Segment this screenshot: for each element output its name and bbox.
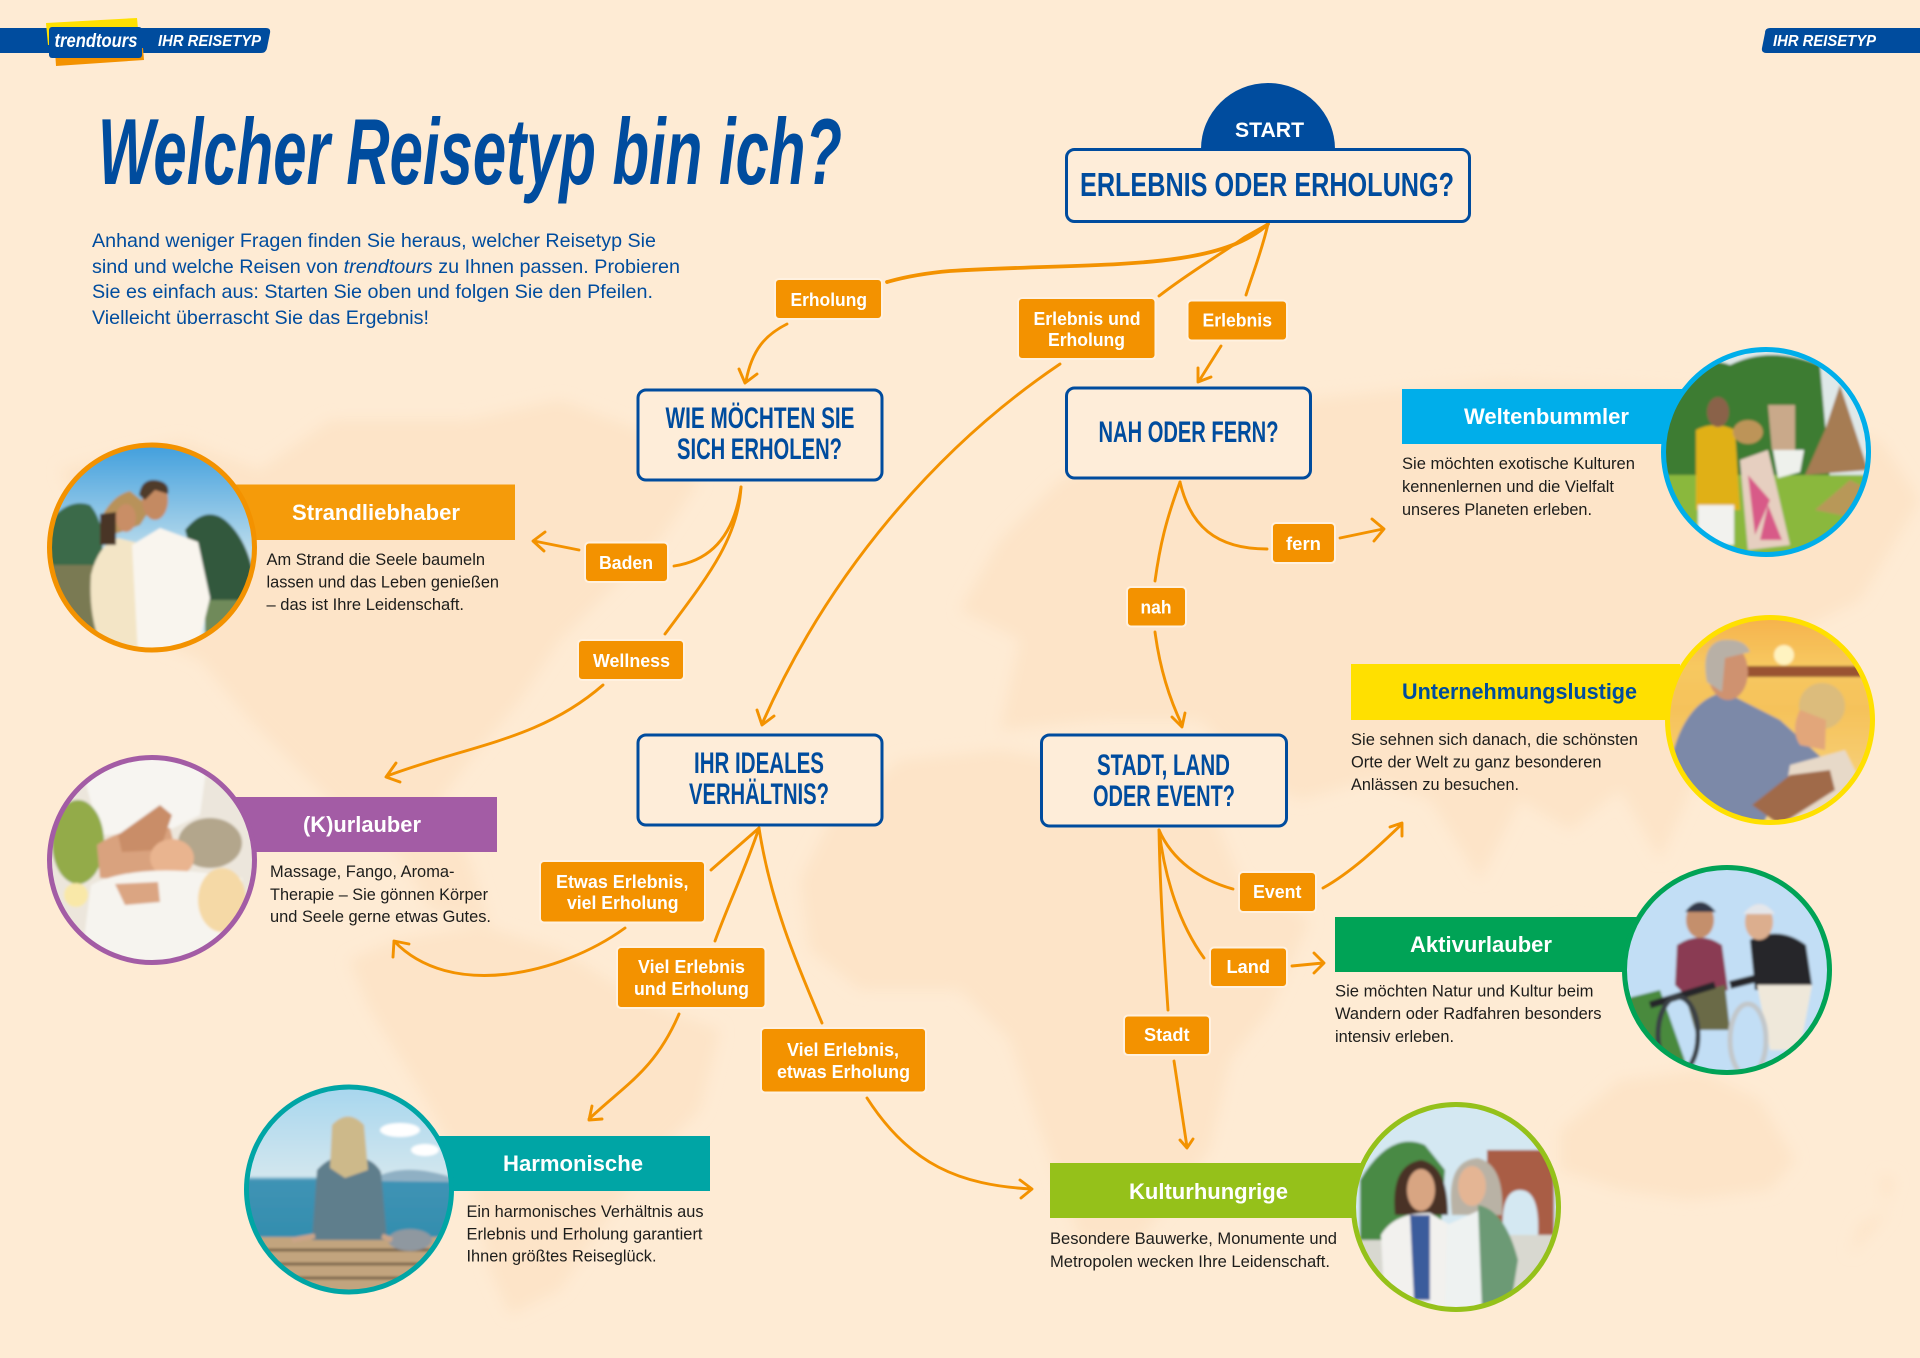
label: Stadt: Stadt — [1144, 1025, 1190, 1045]
label: Baden — [585, 542, 668, 582]
label: Viel Erlebnis und Erholung: und Erholung — [634, 979, 749, 999]
intro text: Anhand weniger Fragen finden Sie heraus, welcher Reisetyp Sie — [92, 230, 656, 252]
banner — [233, 797, 497, 852]
panel: (K)urlauber — [48, 755, 497, 970]
question box: Stadt, Land oder Event — [1042, 735, 1286, 826]
start badge: START — [1235, 119, 1304, 142]
banner title: Unternehmungslustige — [1402, 679, 1637, 704]
description: lassen und das Leben genießen — [266, 574, 499, 592]
question box: Ihr ideales Verhältnis — [638, 735, 882, 825]
description: Therapie – Sie gönnen Körper — [270, 886, 488, 904]
description: Wandern oder Radfahren besonders — [1335, 1005, 1602, 1023]
description: Sie möchten Natur und Kultur beim — [1335, 982, 1594, 1000]
label: Erholung — [775, 279, 882, 319]
label: Erholung: Erholung — [790, 290, 867, 310]
panel: Aktivurlauber — [1335, 862, 1835, 1077]
label: fern: fern — [1286, 534, 1321, 554]
description: Ihnen größtes Reiseglück. — [466, 1248, 656, 1266]
label: Event — [1239, 872, 1316, 912]
banner — [1050, 1163, 1364, 1218]
label: Land — [1210, 948, 1287, 987]
label: Land: Land — [1226, 957, 1270, 977]
description — [1351, 731, 1638, 794]
label: Erlebnis und Erholung: Erholung — [1048, 330, 1125, 350]
description — [1335, 982, 1602, 1046]
question box: Stadt, Land oder Event: ODER EVENT? — [1093, 780, 1235, 813]
label: Erlebnis und Erholung: Erlebnis und — [1034, 309, 1140, 329]
panel: Unternehmungslustige — [1351, 612, 1877, 830]
photo: travellers at temple — [1660, 345, 1872, 565]
title: Welcher Reisetyp bin ich? — [98, 99, 842, 204]
banner — [1335, 917, 1640, 972]
description: unseres Planeten erleben. — [1402, 501, 1592, 519]
label: Viel Erlebnis, etwas Erholung: Viel Erlebnis, — [787, 1040, 899, 1060]
header label: IHR REISETYP — [158, 33, 262, 50]
label: Wellness: Wellness — [593, 651, 670, 671]
question box: Wie möchten Sie sich erholen: WIE MÖCHTEN SIE — [666, 402, 854, 435]
question box: Erlebnis oder Erholung — [1066, 150, 1470, 222]
label: Wellness — [578, 640, 684, 680]
description — [270, 863, 491, 926]
banner title: Harmonische — [503, 1151, 643, 1176]
photo: two cyclists — [1620, 862, 1835, 1077]
label: Event: Event — [1253, 882, 1302, 902]
banner — [1402, 389, 1683, 444]
panel: Harmonische — [244, 1085, 710, 1297]
label: Viel Erlebnis, etwas Erholung — [761, 1028, 926, 1092]
intro text — [92, 230, 680, 329]
world map background — [60, 380, 1920, 1315]
photo: massage — [48, 755, 256, 970]
header bar right — [1762, 28, 1920, 53]
label: fern — [1272, 523, 1335, 563]
question box: Erlebnis oder Erholung: ERLEBNIS ODER ERHOLUNG? — [1080, 166, 1454, 203]
header bar right: IHR REISETYP — [1773, 33, 1877, 50]
description: Sie sehnen sich danach, die schönsten — [1351, 731, 1638, 749]
banner title: Kulturhungrige — [1129, 1179, 1288, 1204]
description: Metropolen wecken Ihre Leidenschaft. — [1050, 1253, 1330, 1271]
label: Etwas Erlebnis, viel Erholung: Etwas Erlebnis, — [556, 872, 688, 892]
header bar left with logo — [0, 18, 270, 66]
label: nah — [1127, 587, 1186, 626]
description — [1402, 455, 1635, 519]
description — [266, 551, 499, 614]
description: – das ist Ihre Leidenschaft. — [266, 596, 464, 614]
label: Etwas Erlebnis, viel Erholung — [540, 861, 705, 922]
photo: two women at arch — [1352, 1102, 1562, 1315]
description: Ein harmonisches Verhältnis aus — [466, 1203, 704, 1221]
label: Etwas Erlebnis, viel Erholung: viel Erholung — [567, 893, 678, 913]
description: Massage, Fango, Aroma- — [270, 863, 454, 881]
banner title: Strandliebhaber — [292, 500, 460, 525]
label: Erlebnis: Erlebnis — [1202, 310, 1272, 330]
banner title: Aktivurlauber — [1410, 932, 1552, 957]
logo: trendtours — [46, 18, 144, 66]
panel: Weltenbummler — [1402, 345, 1872, 565]
description — [1050, 1230, 1337, 1271]
banner title: (K)urlauber — [303, 812, 421, 837]
question box: Wie möchten Sie sich erholen — [638, 390, 882, 480]
photo: woman on jetty — [244, 1085, 454, 1297]
description: Anlässen zu besuchen. — [1351, 776, 1519, 794]
question box: Wie möchten Sie sich erholen: SICH ERHOLEN? — [677, 433, 842, 466]
photo: couple at sunset — [1665, 612, 1877, 830]
panel: Strandliebhaber — [48, 443, 515, 655]
logo: trendtours: trendtours — [54, 31, 138, 52]
description: Am Strand die Seele baumeln — [266, 551, 485, 569]
description: Erlebnis und Erholung garantiert — [466, 1226, 703, 1244]
description: Besondere Bauwerke, Monumente und — [1050, 1230, 1337, 1248]
banner — [1351, 664, 1680, 720]
label: Viel Erlebnis und Erholung: Viel Erlebnis — [638, 957, 745, 977]
description: und Seele gerne etwas Gutes. — [270, 908, 491, 926]
banner title: Weltenbummler — [1464, 404, 1629, 429]
label: nah: nah — [1140, 598, 1172, 618]
description: kennenlernen und die Vielfalt — [1402, 478, 1614, 496]
description: Sie möchten exotische Kulturen — [1402, 455, 1635, 473]
label: Viel Erlebnis und Erholung — [617, 947, 766, 1008]
label: Baden: Baden — [599, 553, 653, 573]
question box: Ihr ideales Verhältnis: IHR IDEALES — [694, 747, 824, 780]
question box: Nah oder fern: NAH ODER FERN? — [1098, 416, 1278, 449]
intro text: sind und welche Reisen von trendtours zu Ihnen passen. Probieren — [92, 256, 680, 278]
intro text: Sie es einfach aus: Starten Sie oben und folgen Sie den Pfeilen. — [92, 281, 653, 303]
panel: Kulturhungrige — [1050, 1102, 1562, 1315]
label: Stadt — [1124, 1016, 1210, 1055]
banner — [233, 484, 515, 540]
description: Orte der Welt zu ganz besonderen — [1351, 754, 1602, 772]
label: Erlebnis — [1188, 300, 1287, 340]
question box: Stadt, Land oder Event: STADT, LAND — [1097, 749, 1230, 782]
label: Viel Erlebnis, etwas Erholung: etwas Erholung — [777, 1062, 910, 1082]
question box: Nah oder fern — [1066, 388, 1310, 478]
label: Erlebnis und Erholung — [1018, 298, 1156, 359]
banner — [439, 1136, 710, 1191]
start badge — [1201, 83, 1335, 150]
question box: Ihr ideales Verhältnis: VERHÄLTNIS? — [689, 778, 829, 811]
arrows and connector lines — [386, 224, 1402, 1198]
photo: couple at beach — [48, 443, 258, 655]
intro text: Vielleicht überrascht Sie das Ergebnis! — [92, 307, 429, 329]
description — [466, 1203, 704, 1266]
description: intensiv erleben. — [1335, 1028, 1454, 1046]
